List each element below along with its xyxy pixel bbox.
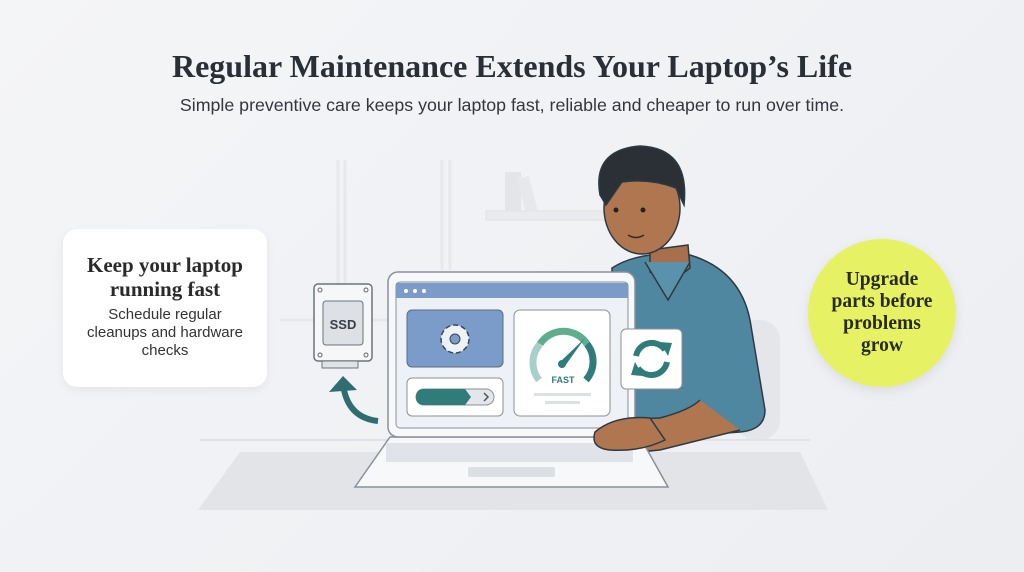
subtitle: Simple preventive care keeps your laptop fast, reliable and cheaper to run over time. [180,95,844,115]
progress bar [407,378,503,416]
laptop [355,272,668,487]
speedometer panel [514,310,610,416]
card heading: Keep your laptop [87,253,243,277]
card text: Schedule regular [108,306,222,323]
callout: upgrade parts circle: grow [861,335,903,356]
arrow: upgrade arrow [329,376,378,421]
card text [87,306,243,359]
hand [594,418,665,450]
icon: SSD [314,284,372,368]
person [589,146,765,451]
window frames [280,160,450,340]
desk [198,452,828,510]
callout: upgrade parts circle: parts before [832,291,932,312]
icon: SSD: SSD [330,317,356,332]
card text: cleanups and hardware [87,324,243,341]
icon: refresh [621,329,682,389]
callout: upgrade parts circle: problems [843,313,921,334]
icon: gear panel [407,310,503,367]
title: Regular Maintenance Extends Your Laptop’s Life [172,48,852,84]
panel: keep laptop fast card [63,229,267,387]
callout: upgrade parts circle [808,239,956,387]
card text: checks [142,342,188,359]
callout: upgrade parts circle: Upgrade [846,269,918,290]
card heading: running fast [110,277,220,301]
speedometer panel: FAST [551,375,575,385]
card heading [87,253,243,301]
